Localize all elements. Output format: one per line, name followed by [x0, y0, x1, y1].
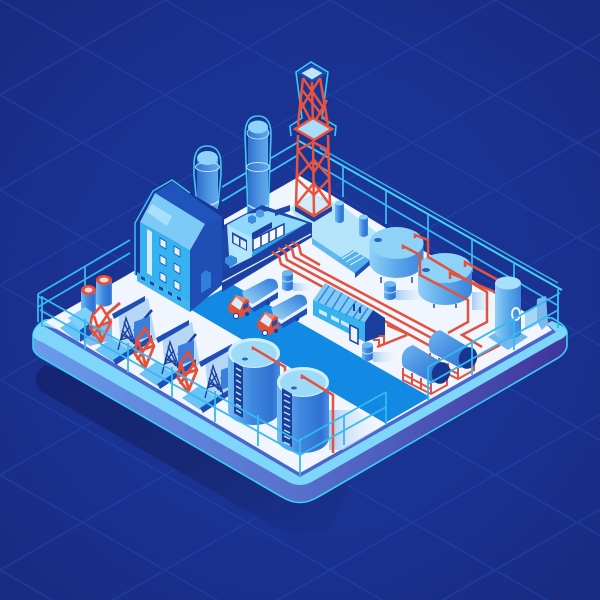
jack tower: [118, 318, 136, 350]
chimney left collar: [196, 201, 219, 206]
jack beam: [112, 296, 145, 319]
warehouse end wall: [365, 310, 385, 342]
horizontal tank lower: [402, 345, 453, 394]
jack rail: [157, 359, 196, 389]
barrel near road shadow: [293, 283, 315, 291]
jack fan: [178, 340, 194, 366]
jack slab: [60, 318, 92, 342]
pumping steps: [337, 250, 370, 278]
warehouse: [313, 283, 385, 346]
building plinth: [137, 272, 190, 312]
truck 2: [257, 295, 307, 336]
truck chassis: [279, 307, 307, 328]
factory annex: [222, 205, 312, 292]
jack shadow: [205, 346, 243, 406]
annex wall below windows: [252, 223, 307, 257]
chimney right collar: [248, 205, 268, 209]
truck wheels: [234, 314, 238, 318]
barrel at tank: [384, 281, 396, 300]
slab front strip: [312, 238, 360, 274]
truck cab: [257, 312, 279, 335]
tank frame: [403, 368, 447, 394]
factory door: [201, 270, 211, 293]
derrick cap: [299, 66, 325, 81]
deck surface: [45, 176, 552, 473]
jack oval: [90, 306, 111, 342]
pipe A: [253, 348, 285, 372]
chimney right cap: [247, 127, 269, 139]
chimney right ring: [246, 162, 270, 172]
platform shadow: [36, 365, 350, 535]
derrick outline: [290, 62, 336, 136]
pipe hooks and main pipes: [272, 242, 441, 347]
big tank B: [277, 367, 333, 453]
tank end: [429, 360, 453, 386]
truck wheels: [262, 330, 268, 336]
building outline: [135, 180, 224, 280]
jack counter arm: [178, 334, 196, 355]
back left fence: [38, 141, 300, 322]
main factory building: [135, 180, 224, 312]
tall window: [147, 229, 152, 276]
jack oval: [135, 328, 154, 368]
warehouse door: [350, 325, 358, 344]
chimney left outline: [194, 146, 221, 205]
derrick platform: [295, 118, 332, 140]
small barrels with red caps: [81, 275, 112, 314]
jack counter arm: [134, 310, 152, 331]
truck tank: [271, 295, 307, 320]
building right wall: [190, 216, 222, 312]
front right fence right part: [428, 293, 560, 400]
truck cab: [228, 295, 250, 318]
front roof: [140, 193, 205, 250]
storage tank back 1: [370, 227, 424, 283]
truck white strip: [276, 302, 307, 324]
platform rim: [33, 321, 567, 485]
small cylinders on slab: [335, 200, 368, 237]
cone vessel: [525, 296, 548, 330]
jack shadow: [78, 318, 112, 346]
jack fan: [221, 364, 237, 390]
chimney right: [245, 116, 271, 215]
truck white strip: [247, 286, 278, 308]
jack box: [68, 307, 92, 330]
back right fence: [299, 141, 562, 328]
barrel near warehouse shadow: [373, 352, 398, 362]
jack beam: [156, 320, 189, 343]
chimney left ring: [196, 162, 220, 172]
annex dark base: [222, 223, 312, 289]
annex back wall: [222, 205, 312, 292]
tank end: [456, 345, 480, 371]
tank body: [402, 345, 446, 383]
jack slab: [95, 338, 132, 362]
light slab behind tanks: [290, 194, 376, 274]
jack shadow: [118, 298, 156, 358]
chimney left cap: [197, 151, 218, 165]
jack rail: [113, 335, 152, 365]
jack shadow: [162, 322, 200, 382]
annex top: [227, 211, 307, 255]
truck chassis: [250, 291, 278, 312]
deck edge: [42, 325, 556, 477]
lower legs: [296, 135, 330, 216]
chimney right outline: [245, 116, 271, 215]
ladder A: [234, 362, 243, 418]
jack counter arm: [221, 358, 239, 379]
process pipes: [377, 235, 500, 357]
tall vessel: [488, 276, 528, 350]
derrick base: [295, 195, 332, 217]
shadow behind tank 2: [472, 292, 495, 310]
front tank shadow: [329, 410, 383, 450]
warehouse roof: [313, 283, 373, 322]
jack slab: [182, 386, 219, 410]
jack oval: [178, 352, 197, 392]
storage tank back 2: [418, 253, 472, 308]
front left fence: [38, 294, 300, 476]
horizontal tank upper: [429, 330, 480, 379]
annex dark step: [275, 205, 290, 216]
upper legs: [298, 78, 328, 130]
warehouse pipe hooks: [373, 336, 384, 346]
tank frame: [430, 353, 474, 379]
jack tower: [205, 366, 223, 398]
annex left wall: [227, 225, 252, 270]
roof ribs: [318, 286, 368, 321]
roof skylight: [147, 204, 172, 226]
barrel near road: [282, 270, 293, 291]
derrick tower: [290, 62, 336, 222]
jack arm: [106, 303, 120, 315]
big tank A: [228, 338, 285, 425]
annex navy bar: [252, 222, 272, 239]
platform base: [33, 176, 567, 502]
windows: [160, 238, 180, 291]
jack beam: [199, 344, 232, 367]
back roof: [155, 182, 222, 224]
vessel base: [488, 325, 528, 350]
plinth vents: [141, 276, 181, 301]
pipe B: [302, 376, 333, 453]
warehouse windows: [319, 309, 349, 328]
jack tower: [162, 342, 180, 374]
annex window band: [253, 224, 284, 251]
chimney left body: [197, 160, 218, 212]
chimney left: [194, 146, 221, 212]
annex small box: [225, 255, 237, 267]
barrel shadow by tank: [396, 290, 430, 300]
front right fence left part: [300, 392, 386, 455]
building left wall: [140, 222, 190, 303]
road: [188, 284, 430, 423]
tank body: [429, 330, 473, 368]
annex vents: [248, 215, 256, 224]
chimney right body: [248, 128, 268, 212]
truck 1: [228, 279, 278, 318]
derrick base strip: [295, 206, 332, 222]
jack rail: [200, 383, 239, 413]
jack slab: [139, 362, 176, 386]
pump jack 1: [95, 296, 156, 365]
jack fan: [134, 316, 150, 342]
pump jack 2: [135, 320, 200, 389]
pump jack 3: [178, 344, 243, 413]
slab top: [290, 194, 376, 274]
warehouse left wall: [313, 300, 365, 342]
roof vents: [354, 304, 360, 313]
platform side: [33, 300, 567, 502]
annex base stripe: [222, 234, 311, 282]
truck tank: [242, 279, 278, 304]
annex left windows: [232, 232, 247, 251]
pump jack 0: [60, 303, 120, 346]
barrel near warehouse: [362, 342, 373, 361]
ladder B: [282, 388, 292, 447]
